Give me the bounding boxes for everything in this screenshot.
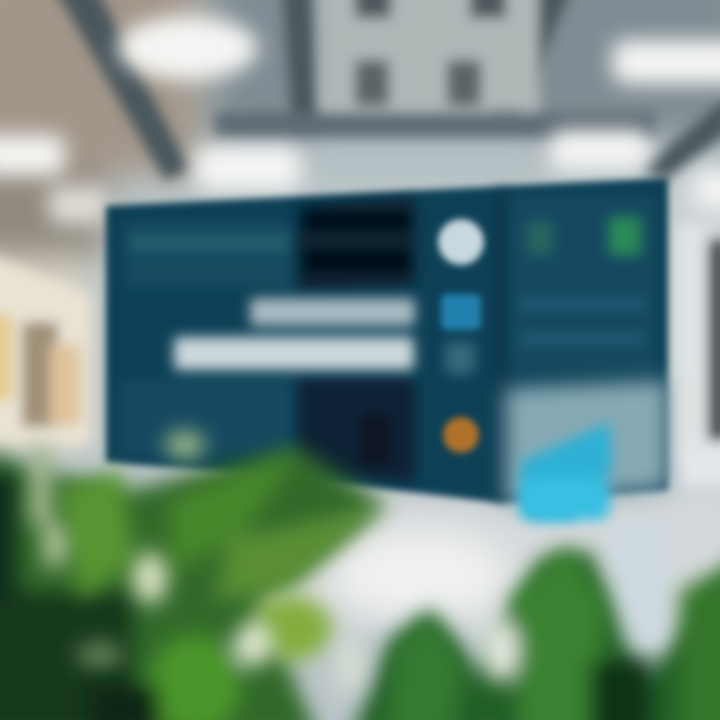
screen: right data panel (496, 190, 655, 500)
ceiling vent panel (318, 0, 540, 112)
floor highlight (210, 520, 510, 620)
screen: dark central column (298, 198, 415, 482)
screen: icon column (438, 219, 484, 453)
ceiling lights (0, 16, 720, 224)
screen: bright headline text block (174, 298, 415, 370)
icon: orange circle (443, 417, 479, 453)
screen: chart panel with cyan area (505, 380, 668, 520)
left wall and column (0, 250, 90, 445)
icon: white circle (438, 219, 484, 265)
plant: right foliage (336, 545, 720, 720)
icon: blue square (441, 294, 481, 330)
icon: grey block (445, 342, 475, 374)
display screen (106, 178, 668, 520)
right wall details (610, 225, 720, 650)
plant: left foliage (0, 431, 385, 720)
screen: top-left panel (120, 222, 295, 455)
